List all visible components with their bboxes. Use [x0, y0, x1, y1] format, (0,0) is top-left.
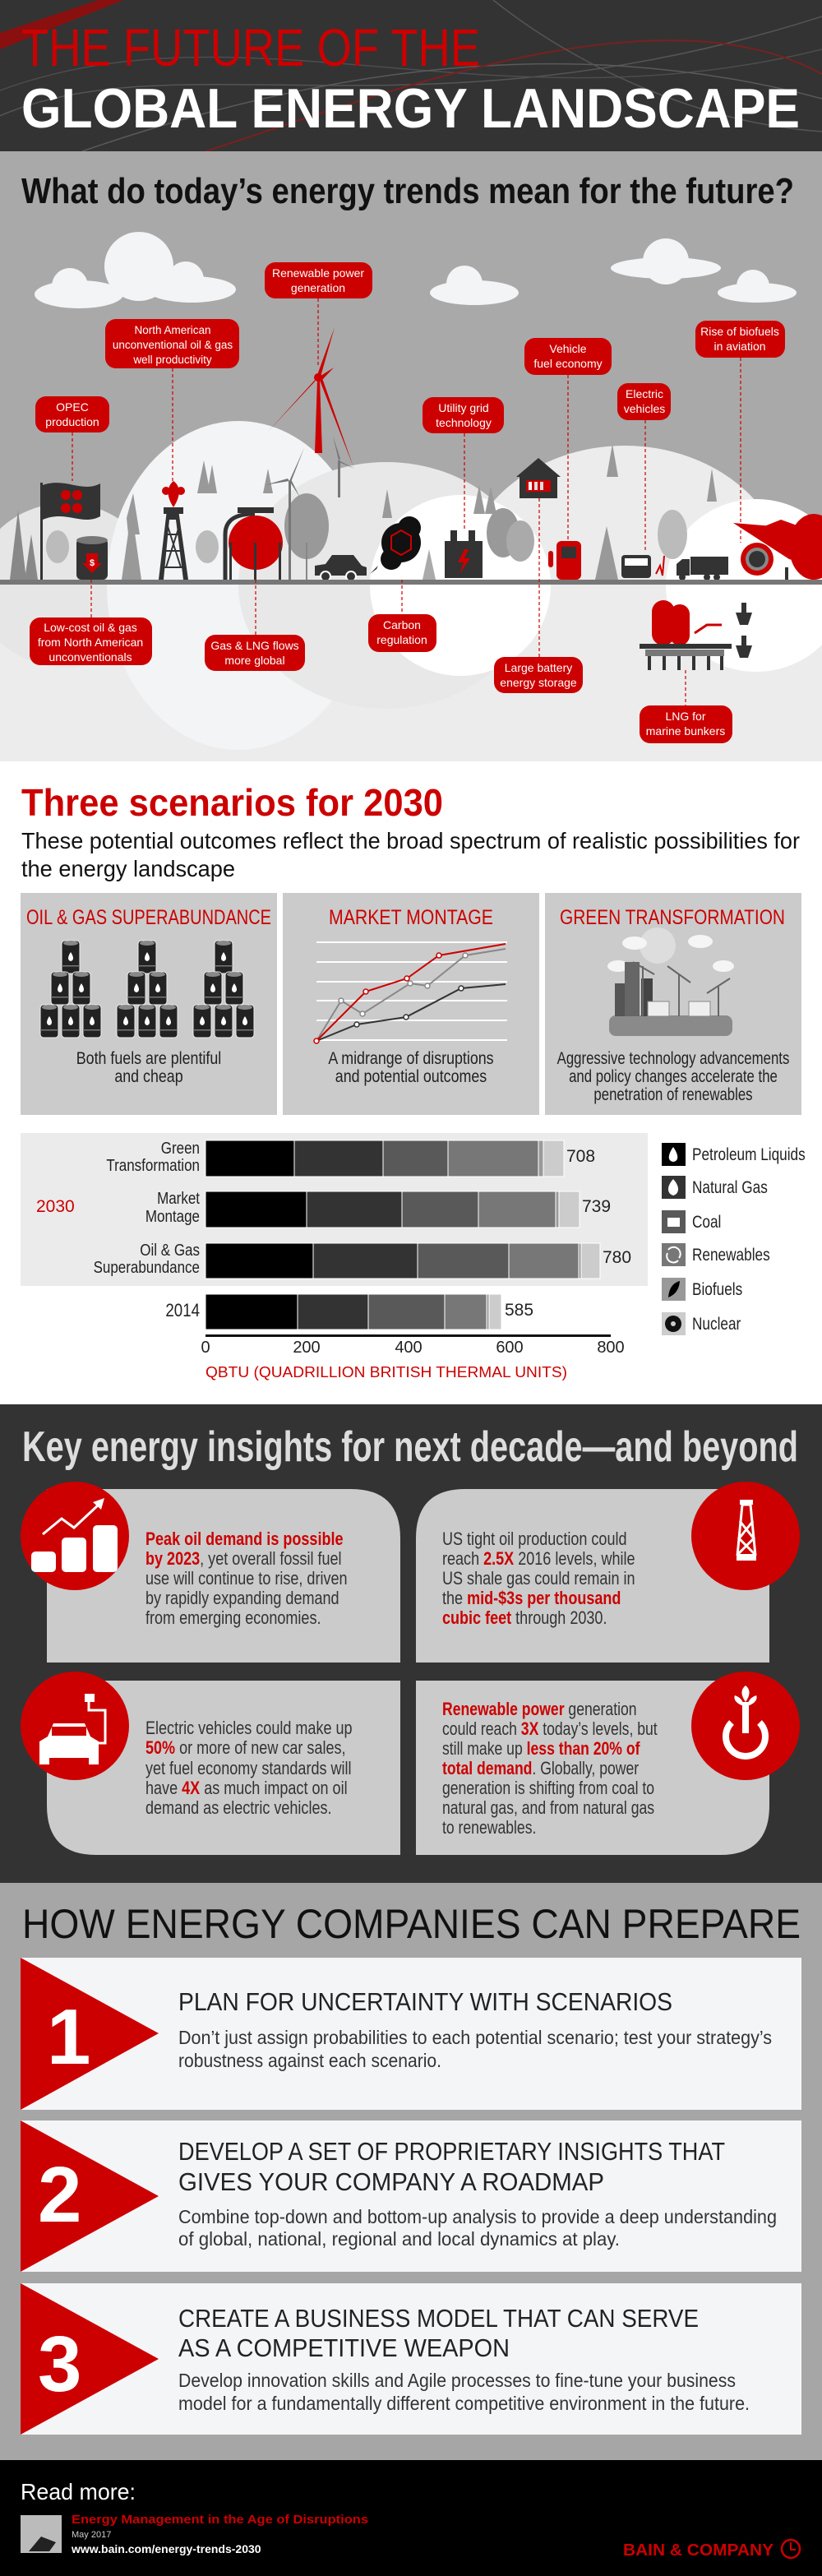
- label: low-cost oil and gas: unconventionals: [48, 650, 132, 664]
- line chart: [314, 942, 507, 1043]
- label: north american unconventional: North American: [134, 324, 211, 336]
- trees: [10, 444, 717, 580]
- prepare section: [0, 1883, 822, 2460]
- label: rise of biofuels: in aviation: [713, 340, 766, 353]
- step 3: model for a fundamentally different competitive environment in the future.: [178, 2393, 750, 2414]
- stacked bar chart: 780: [603, 1248, 631, 1267]
- label: utility grid technology: technology: [436, 416, 492, 429]
- panel: green transformation: penetration of renewables: [593, 1085, 753, 1105]
- stacked bar chart: Superabundance: [94, 1258, 200, 1276]
- icon: carbon cloud: [370, 516, 421, 574]
- header banner: [0, 0, 822, 151]
- label: carbon regulation: regulation: [376, 633, 427, 646]
- bar: market montage: [206, 1191, 580, 1228]
- icon: fuel truck: [677, 557, 728, 580]
- label: low-cost oil and gas: from North American: [38, 636, 143, 649]
- icon: electric car: [621, 555, 664, 578]
- scenarios heading: [21, 781, 800, 881]
- stacked bar chart: Transformation: [106, 1156, 200, 1174]
- card: electric vehicles: demand as electric vehicles.: [145, 1798, 332, 1818]
- label: large battery storage: Large battery: [505, 661, 572, 674]
- panel: green transformation: [545, 893, 801, 1115]
- icon: battery house: [516, 458, 561, 498]
- scenarios heading: Three scenarios for 2030: [21, 781, 443, 824]
- ground line: [0, 580, 822, 585]
- step 2: Combine top-down and bottom-up analysis to provide a deep understanding: [178, 2206, 777, 2227]
- label: renewable power generation: [265, 262, 372, 298]
- label: OPEC production: [35, 396, 109, 432]
- bar: 2014: [206, 1294, 501, 1330]
- label: rise of biofuels: [695, 321, 785, 358]
- step 3: [21, 2283, 801, 2435]
- label: renewable power generation: Renewable power: [272, 266, 364, 280]
- card: US tight oil: the mid-$3s per thousand: [442, 1589, 621, 1608]
- stacked bar chart: 200: [293, 1339, 321, 1357]
- stacked bar chart: 708: [566, 1147, 595, 1166]
- panel: market montage: A midrange of disruptions: [328, 1049, 494, 1068]
- card: renewable power: natural gas, and from natural gas: [442, 1798, 654, 1819]
- stacked bar chart: 739: [582, 1197, 611, 1216]
- label: LNG for marine bunkers: [640, 705, 732, 743]
- stacked bar chart: 600: [496, 1339, 524, 1357]
- wind turbines: [265, 327, 355, 580]
- label: LNG for marine bunkers: marine bunkers: [646, 724, 725, 738]
- card: renewable power: to renewables.: [442, 1818, 536, 1838]
- label: gas and LNG flows: more global: [224, 654, 285, 667]
- insights section: [0, 1404, 822, 1883]
- label: OPEC production: OPEC: [56, 400, 89, 414]
- card: renewable power: still make up less than 20% of: [442, 1739, 640, 1760]
- report thumbnail: [21, 2515, 62, 2553]
- card: renewable power: could reach 3X today’s levels, but: [442, 1719, 658, 1740]
- card: electric vehicles: Electric vehicles could make up: [145, 1718, 353, 1738]
- label: electric vehicles: vehicles: [624, 402, 665, 415]
- stacked bar chart: Green: [161, 1139, 200, 1157]
- label: electric vehicles: [617, 383, 671, 420]
- stacked bar chart: 2014: [165, 1302, 200, 1320]
- label: large battery storage: [494, 657, 583, 693]
- step 1: 1: [47, 1993, 90, 2081]
- legend: Nuclear: [692, 1316, 741, 1334]
- footer: Read more:: [21, 2479, 136, 2504]
- card: electric vehicles: [21, 1672, 400, 1855]
- stacked bar chart: Montage: [145, 1207, 200, 1225]
- icon: transformer: [445, 530, 483, 578]
- stacked bar chart: Market: [157, 1189, 201, 1207]
- landscape section: [0, 151, 822, 761]
- legend: Biofuels: [692, 1281, 742, 1299]
- card: renewable power: Renewable power generation: [442, 1700, 637, 1720]
- label: north american unconventional: well productivity: [132, 354, 212, 366]
- step 1: [21, 1958, 801, 2110]
- bar: oil and gas superabundance: [206, 1243, 600, 1279]
- label: OPEC production: production: [45, 415, 99, 428]
- card: US tight oil: [416, 1482, 800, 1663]
- card: peak oil demand: by rapidly expanding demand: [145, 1589, 339, 1608]
- card: US tight oil: cubic feet through 2030.: [442, 1608, 607, 1628]
- stacked bar chart: Oil & Gas: [140, 1241, 200, 1259]
- scenarios subtitle: These potential outcomes reflect the broad spectrum of realistic possibilities for: [21, 828, 800, 853]
- step 3: CREATE A BUSINESS MODEL THAT CAN SERVE: [178, 2304, 699, 2333]
- scenarios subtitle: the energy landscape: [21, 856, 235, 881]
- panel: market montage: [283, 893, 539, 1115]
- icon: green city: [607, 927, 734, 1036]
- stacked bar chart: 800: [597, 1339, 625, 1357]
- clouds and sun: [35, 232, 797, 308]
- panel: oil and gas superabundance: and cheap: [114, 1067, 183, 1086]
- step 3: AS A COMPETITIVE WEAPON: [178, 2333, 510, 2362]
- label: gas and LNG flows: [205, 635, 305, 671]
- card: peak oil demand: Peak oil demand is possible: [145, 1529, 344, 1549]
- stacked bar chart: 0: [201, 1339, 210, 1357]
- card: renewable power: [416, 1672, 800, 1855]
- card: peak oil demand: by 2023, yet overall fossil fuel: [145, 1549, 342, 1569]
- footer: Energy Management in the Age of Disruptions: [72, 2513, 368, 2527]
- label: LNG for marine bunkers: LNG for: [665, 710, 706, 723]
- label: carbon regulation: [368, 614, 436, 652]
- label: gas and LNG flows: Gas & LNG flows: [210, 639, 299, 652]
- label: utility grid technology: [423, 397, 504, 433]
- label: electric vehicles: Electric: [626, 387, 663, 400]
- card: peak oil demand: use will continue to rise, driven: [145, 1569, 348, 1589]
- footer: www.bain.com/energy-trends-2030: [71, 2542, 261, 2555]
- step 1: robustness against each scenario.: [178, 2050, 441, 2071]
- icon: fuel pump: [548, 541, 581, 580]
- icon: LNG tank: [225, 507, 283, 580]
- legend: Renewables: [692, 1246, 770, 1265]
- dashed connector lines: [72, 298, 741, 705]
- icon: barrel pyramids: [40, 941, 254, 1038]
- icon: car: [315, 555, 367, 581]
- label: north american unconventional: unconventional oil & gas: [113, 339, 233, 351]
- icon: red wind turbine: [268, 327, 353, 467]
- bar: green transformation: [206, 1140, 564, 1177]
- label: utility grid technology: Utility grid: [438, 401, 489, 414]
- card: US tight oil: reach 2.5X 2016 levels, while: [442, 1549, 635, 1569]
- step 2: 2: [38, 2151, 81, 2239]
- stacked bar chart: QBTU (QUADRILLION BRITISH THERMAL UNITS): [206, 1364, 567, 1380]
- step 2: DEVELOP A SET OF PROPRIETARY INSIGHTS THAT: [178, 2137, 725, 2166]
- step 3: 3: [38, 2320, 81, 2408]
- card: peak oil demand: from emerging economies.: [145, 1608, 321, 1628]
- panel: oil and gas superabundance: Both fuels are plentiful: [76, 1049, 221, 1068]
- card: renewable power: generation is shifting from coal to: [442, 1778, 654, 1799]
- label: vehicle fuel economy: [524, 338, 612, 375]
- card: electric vehicles: 50% or more of new car sales,: [145, 1738, 346, 1758]
- step 1: PLAN FOR UNCERTAINTY WITH SCENARIOS: [178, 1987, 672, 2016]
- panel: green transformation: Aggressive technology advancements: [557, 1049, 789, 1069]
- icon: oil barrel with dollar: $: [90, 558, 95, 568]
- label: vehicle fuel economy: Vehicle: [549, 342, 587, 355]
- card: US tight oil: US shale gas could remain in: [442, 1569, 635, 1589]
- panel: market montage: and potential outcomes: [335, 1067, 487, 1086]
- stacked bar chart: 2030: [36, 1197, 75, 1216]
- step 3: Develop innovation skills and Agile processes to fine-tune your business: [178, 2370, 736, 2391]
- legend: Natural Gas: [692, 1179, 768, 1197]
- label: large battery storage: energy storage: [500, 676, 577, 689]
- legend: Coal: [692, 1214, 721, 1232]
- icon: LNG marine platform: [640, 600, 752, 670]
- legend: Petroleum Liquids: [692, 1146, 806, 1164]
- label: renewable power generation: generation: [291, 281, 345, 294]
- icon: OPEC flag: [40, 483, 100, 580]
- panel: green transformation: and policy changes accelerate the: [569, 1067, 778, 1087]
- icon: airplane: [733, 514, 822, 580]
- panel: green transformation: GREEN TRANSFORMATION: [560, 906, 785, 929]
- step 1: Don’t just assign probabilities to each potential scenario; test your strategy’s: [178, 2027, 772, 2048]
- card: peak oil demand: [21, 1482, 400, 1663]
- label: low-cost oil and gas: Low-cost oil & gas: [44, 621, 137, 634]
- card: US tight oil: US tight oil production could: [442, 1529, 627, 1549]
- stacked bar chart: 585: [505, 1301, 533, 1320]
- axis: [206, 1334, 611, 1337]
- label: vehicle fuel economy: fuel economy: [533, 357, 603, 370]
- label: carbon regulation: Carbon: [383, 618, 421, 631]
- step 2: of global, national, regional and local dynamics at play.: [178, 2228, 620, 2250]
- footer: [0, 2460, 822, 2576]
- footer: May 2017: [72, 2530, 111, 2540]
- panel: oil and gas superabundance: OIL & GAS SUPERABUNDANCE: [26, 906, 271, 929]
- label: north american unconventional: [105, 319, 239, 368]
- Bain logo: BAIN & COMPANY: [623, 2541, 774, 2560]
- icon: oil barrel with dollar: [76, 536, 108, 580]
- card: renewable power: total demand. Globally, power: [442, 1759, 639, 1779]
- panel: market montage: MARKET MONTAGE: [329, 906, 493, 929]
- step 2: [21, 2120, 801, 2272]
- stacked bar chart: 400: [395, 1339, 423, 1357]
- step 2: GIVES YOUR COMPANY A ROADMAP: [178, 2167, 604, 2196]
- card: electric vehicles: yet fuel economy standards will: [145, 1759, 352, 1778]
- stacked bar chart: [21, 1133, 648, 1380]
- panel: oil and gas superabundance: [21, 893, 277, 1115]
- label: rise of biofuels: Rise of biofuels: [700, 325, 779, 338]
- legend: [662, 1143, 806, 1335]
- label: low-cost oil and gas: [30, 617, 152, 665]
- icon: oil derrick: [159, 481, 188, 580]
- title line 1: THE FUTURE OF THE: [21, 18, 480, 77]
- hills: [0, 421, 822, 750]
- card: electric vehicles: have 4X as much impact on oil: [145, 1778, 348, 1798]
